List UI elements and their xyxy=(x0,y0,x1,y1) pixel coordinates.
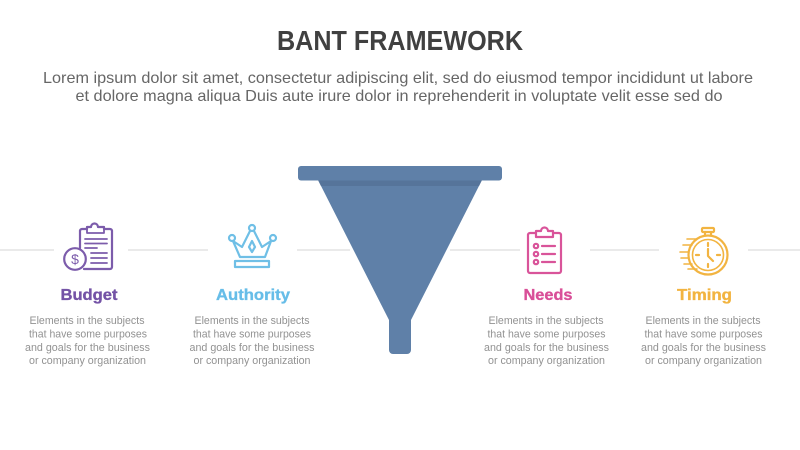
title: BANT FRAMEWORK xyxy=(277,25,523,56)
text: authority description xyxy=(190,315,315,367)
text: needs description xyxy=(484,315,609,367)
panel: timing xyxy=(641,228,766,367)
text: needs description: or company organization xyxy=(488,355,605,367)
text: budget description: that have some purposes xyxy=(29,328,147,340)
icon: stopwatch xyxy=(680,228,728,274)
text: timing description: and goals for the business xyxy=(641,342,766,354)
text: authority description: or company organization xyxy=(194,355,310,367)
text: timing description: or company organization xyxy=(645,355,762,367)
text: budget description: and goals for the business xyxy=(25,342,150,354)
text: authority description: Elements in the subjects xyxy=(194,315,310,327)
funnel xyxy=(298,166,502,354)
panel: authority xyxy=(190,225,315,367)
text: budget description xyxy=(25,315,150,367)
text: budget description: or company organization xyxy=(29,355,146,367)
heading: needs: Needs xyxy=(524,287,573,304)
subtitle: et dolore magna aliqua Duis aute irure dolor in reprehenderit in voluptate velit esse sed do xyxy=(76,88,723,105)
text: needs description: and goals for the business xyxy=(484,342,609,354)
icon: crown xyxy=(229,225,276,267)
text: needs description: that have some purposes xyxy=(488,328,606,340)
icon: clipboard with dollar coin: $ xyxy=(71,251,79,267)
icon: clipboard with dollar coin xyxy=(64,224,112,270)
text: timing description: Elements in the subjects xyxy=(646,315,761,327)
panel: needs xyxy=(484,228,609,367)
icon: checklist clipboard xyxy=(528,228,561,273)
text: budget description: Elements in the subjects xyxy=(30,315,145,327)
subtitle: Lorem ipsum dolor sit amet, consectetur adipiscing elit, sed do eiusmod tempor incididunt ut labore xyxy=(43,70,753,87)
heading: budget: Budget xyxy=(60,287,118,304)
text: authority description: that have some purposes xyxy=(193,328,311,340)
text: timing description: that have some purposes xyxy=(644,328,763,340)
heading: authority: Authority xyxy=(216,287,290,304)
text: timing description xyxy=(641,315,766,367)
text: authority description: and goals for the business xyxy=(190,342,315,354)
heading: timing: Timing xyxy=(677,287,732,304)
panel: budget xyxy=(25,224,150,367)
subtitle xyxy=(43,70,753,105)
text: needs description: Elements in the subjects xyxy=(488,315,604,327)
